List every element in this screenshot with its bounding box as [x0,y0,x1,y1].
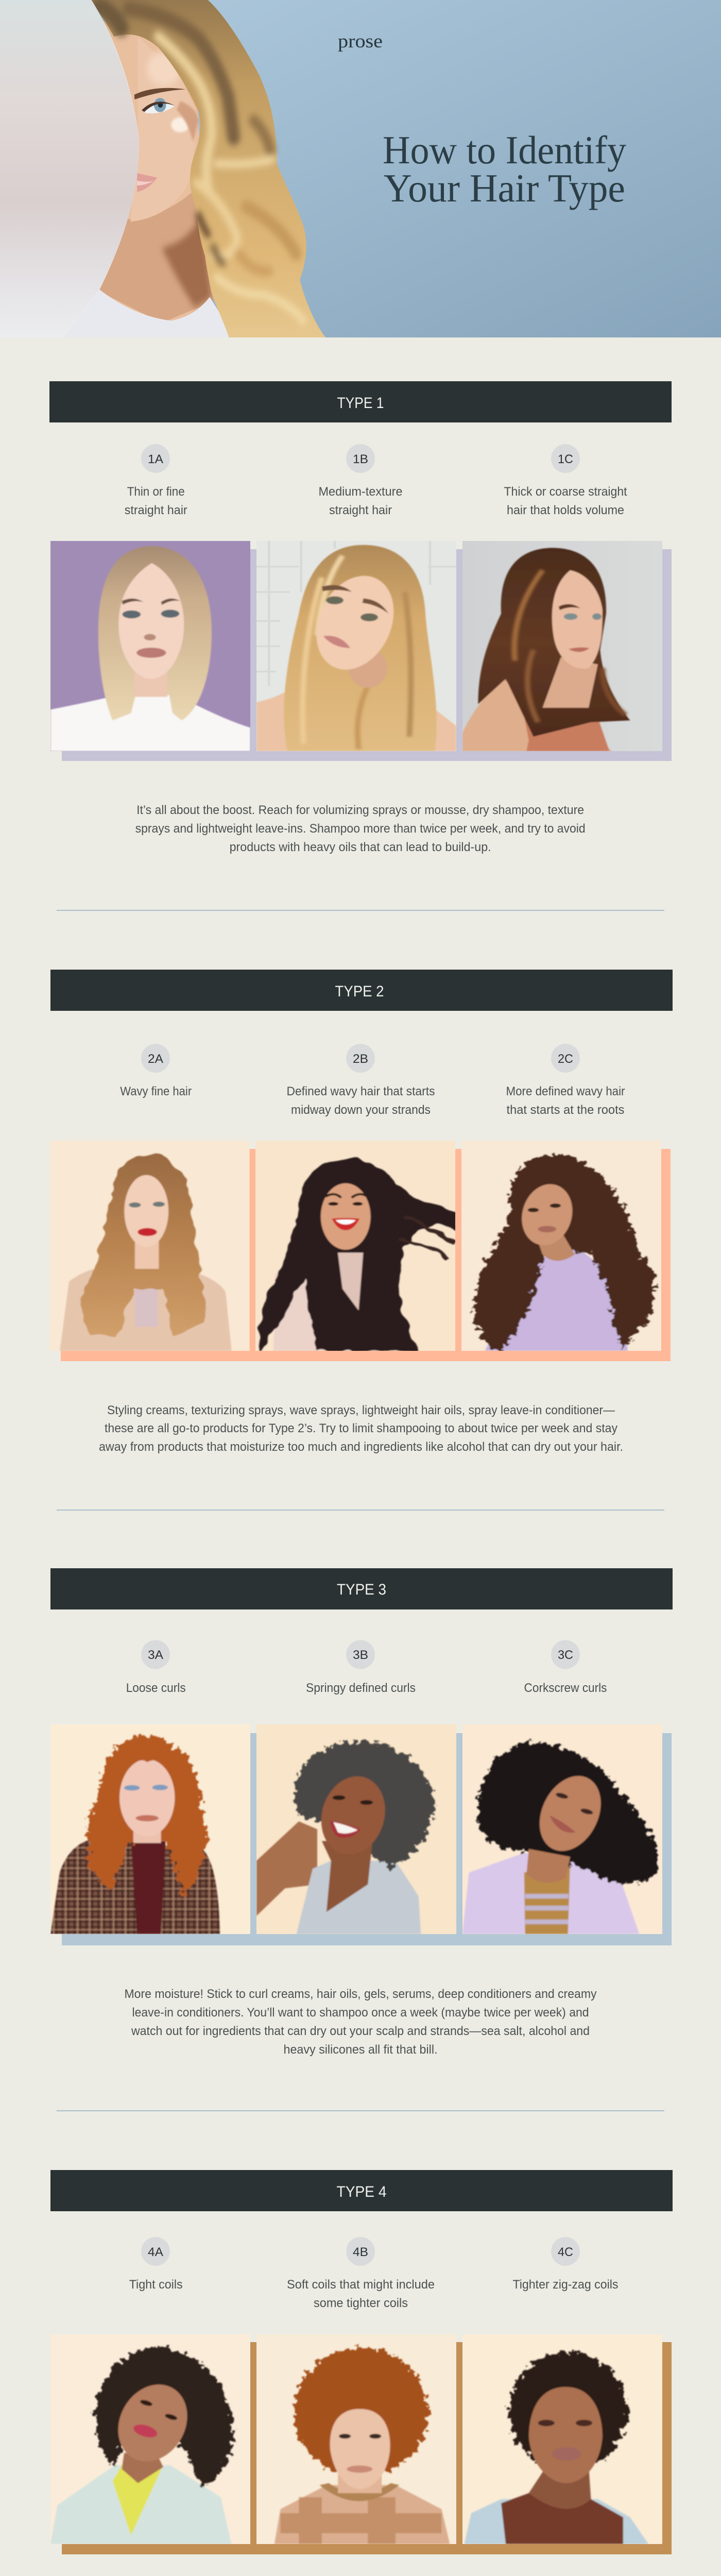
column 2B: midway down your strands [291,1103,431,1117]
column 1C: Thick or coarse straight [504,485,627,499]
description text: It’s all about the boost. Reach for volumizing sprays or mousse, dry shampoo, texture [136,803,584,817]
description text: away from products that moisturize too much and ingredients like alcohol that can dry out your hair. [99,1440,623,1454]
heading bar: type 4 [50,2170,673,2211]
photo 2C [461,1141,661,1351]
hero photo: woman with blonde hair [62,0,325,337]
column 3A: 3A [148,1648,163,1662]
frosted oval overlay [0,0,139,337]
description text: heavy silicones all fit that bill. [283,2043,438,2057]
photo 4B [256,2334,456,2544]
column 1B: Medium-texture [318,485,403,499]
frost edge highlight [62,0,139,337]
column 3B: Springy defined curls [306,1681,416,1695]
hair shading [99,7,303,320]
column 1A [125,444,187,517]
skin [88,22,213,337]
photo 1A [50,541,250,751]
description text: Styling creams, texturizing sprays, wave sprays, lightweight hair oils, spray leave-in conditioner— [107,1403,615,1417]
photo 3C [462,1724,662,1934]
heading bar: type 2: TYPE 2 [335,983,384,1000]
column 2A [120,1044,192,1098]
heading bar: type 3 [50,1568,673,1609]
column 3A: Loose curls [126,1681,186,1695]
column 3A [126,1640,186,1695]
title: How to Identify [383,128,626,172]
column 4C: 4C [558,2245,573,2259]
eye [143,102,175,113]
column 1B: 1B [353,452,368,466]
column 3C [524,1640,607,1695]
column 4B [287,2237,435,2310]
panel: type 1 [49,381,672,854]
photo 1B [256,541,456,751]
column 1A: 1A [148,452,163,466]
column 2C: that starts at the roots [507,1103,624,1117]
photo backing [62,549,672,761]
description text: leave-in conditioners. You’ll want to shampoo once a week (maybe twice per week) and [132,2006,589,2020]
heading bar: type 1 [49,381,672,422]
eyebrow [134,88,186,99]
description text: sprays and lightweight leave-ins. Shampoo more than twice per week, and try to avoid [135,822,586,836]
description text [135,803,586,854]
long wavy hair [91,0,325,337]
description text: products with heavy oils that can lead to build-up. [230,840,491,854]
column 2A: 2A [148,1052,163,1066]
column 1C: hair that holds volume [507,503,624,517]
photo 3B [256,1724,456,1934]
column 2B [286,1044,435,1117]
hero background [0,0,721,337]
column 2A: Wavy fine hair [120,1084,192,1098]
column 4C: Tighter zig-zag coils [513,2278,618,2292]
column 1A: straight hair [125,503,187,517]
description text: watch out for ingredients that can dry out your scalp and strands—sea salt, alcohol and [131,2024,590,2038]
heading bar: type 2 [50,970,673,1011]
column 1B [318,444,403,517]
panel: type 4 [50,2170,673,2576]
hero banner [0,0,721,337]
column 3B: 3B [353,1648,368,1662]
column 4C [513,2237,618,2292]
photo backing [62,2342,672,2554]
photo 4C [462,2334,662,2544]
description text [125,1987,596,2057]
column 2B: 2B [353,1052,368,1066]
description text: these are all go-to products for Type 2’s. Try to limit shampooing to about twice per week and stay [105,1421,617,1435]
panel: type 2 [49,970,673,1454]
column 1B: straight hair [329,503,392,517]
column 1C: 1C [558,452,573,466]
photo 1C [462,541,662,751]
logo: prose: prose [338,31,383,52]
photo backing [61,1149,671,1361]
column 4A: Tight coils [129,2278,183,2292]
title: Your Hair Type [384,166,625,210]
photo 4A [50,2334,250,2544]
heading bar: type 1: TYPE 1 [337,395,384,412]
title [383,128,626,210]
photo 2A [49,1141,249,1351]
photo 3A [50,1724,250,1934]
column 1C [504,444,627,517]
heading bar: type 4: TYPE 4 [337,2183,386,2200]
column 2C [506,1044,625,1117]
column 1A: Thin or fine [127,485,185,499]
photo 2B [255,1141,455,1351]
heading bar: type 3: TYPE 3 [337,1581,386,1598]
photo backing [62,1733,672,1945]
column 4A [129,2237,183,2292]
column 3B [306,1640,416,1695]
white shirt [52,290,235,337]
description text: More moisture! Stick to curl creams, hair oils, gels, serums, deep conditioners and creamy [125,1987,596,2001]
column 4B: some tighter coils [314,2296,408,2310]
column 2C: More defined wavy hair [506,1084,625,1098]
column 3C: 3C [558,1648,573,1662]
column 3C: Corkscrew curls [524,1681,607,1695]
column 4B: 4B [353,2245,368,2259]
column 2B: Defined wavy hair that starts [286,1084,435,1098]
lips [137,173,157,192]
column 4B: Soft coils that might include [287,2278,435,2292]
description text [99,1403,623,1454]
column 2C: 2C [558,1052,573,1066]
column 4A: 4A [148,2245,163,2259]
panel: type 3 [50,1568,673,2057]
